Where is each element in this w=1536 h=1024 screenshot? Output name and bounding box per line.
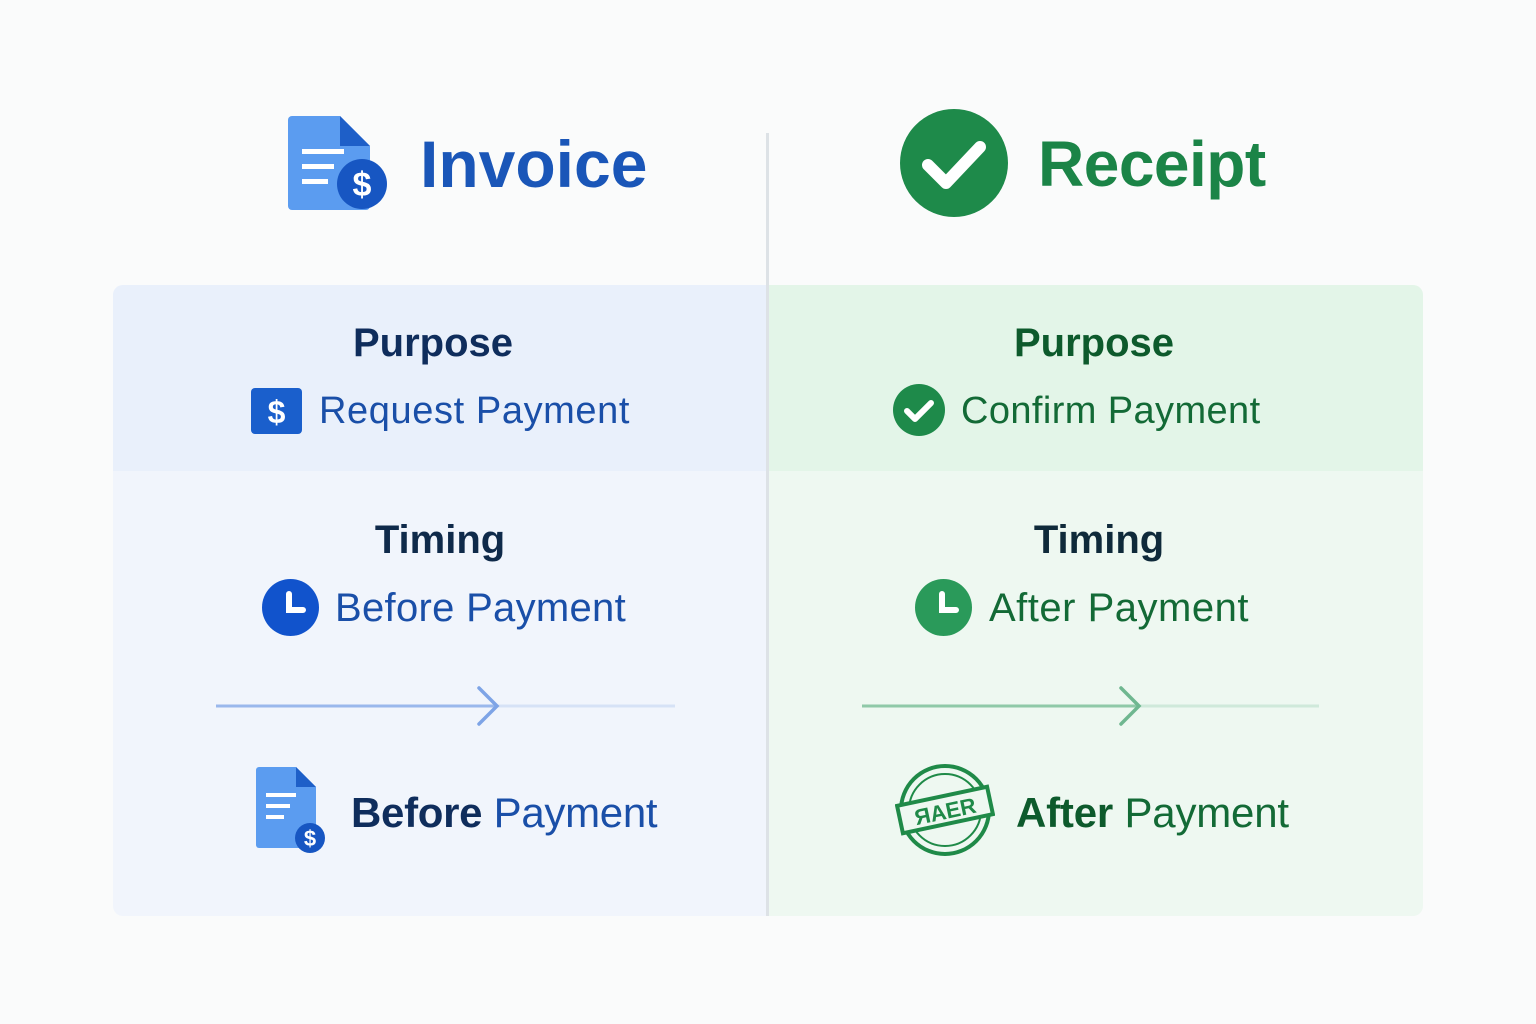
text: request payment: Request Payment bbox=[319, 390, 630, 432]
heading: receipt timing: Timing bbox=[1034, 518, 1164, 562]
panel: receipt bbox=[769, 285, 1423, 916]
title: invoice: Invoice bbox=[420, 127, 647, 201]
icon: clock green bbox=[915, 579, 972, 636]
heading: invoice purpose: Purpose bbox=[353, 321, 513, 365]
heading: receipt purpose: Purpose bbox=[1014, 321, 1174, 365]
text: confirm payment: Confirm Payment bbox=[961, 390, 1261, 432]
arrow: invoice timeline bbox=[216, 686, 675, 726]
icon: dollar square: $ bbox=[268, 394, 286, 430]
text: confirm payment bbox=[893, 384, 1261, 436]
icon: paid stamp bbox=[895, 764, 995, 856]
icon: receipt check bbox=[900, 109, 1008, 217]
icon: small check bbox=[893, 384, 945, 436]
text: before payment bbox=[262, 579, 626, 636]
icon: paid stamp: ЯAER bbox=[912, 793, 978, 830]
arrow: receipt timeline bbox=[862, 686, 1319, 726]
text: after payment: After Payment bbox=[989, 586, 1249, 630]
bottom: invoice before payment bbox=[256, 767, 658, 853]
icon: small invoice doc: $ bbox=[304, 826, 316, 851]
icon: invoice document bbox=[288, 116, 387, 210]
text: before payment: Before Payment bbox=[335, 586, 626, 630]
panel band: receipt purpose bbox=[769, 285, 1423, 471]
title: receipt: Receipt bbox=[1038, 128, 1266, 200]
icon: dollar square bbox=[251, 388, 302, 434]
icon: invoice document: $ bbox=[353, 166, 372, 204]
panel: invoice bbox=[113, 285, 767, 916]
panel band: invoice purpose bbox=[113, 285, 767, 471]
heading: invoice timing: Timing bbox=[375, 518, 505, 562]
icon: small invoice doc bbox=[256, 767, 325, 853]
bottom: invoice before payment: Before Payment bbox=[351, 789, 657, 836]
text: after payment bbox=[915, 579, 1249, 636]
bottom: receipt after payment: After Payment bbox=[1016, 789, 1289, 836]
icon: clock blue bbox=[262, 579, 319, 636]
bottom: receipt after payment bbox=[895, 764, 1289, 856]
